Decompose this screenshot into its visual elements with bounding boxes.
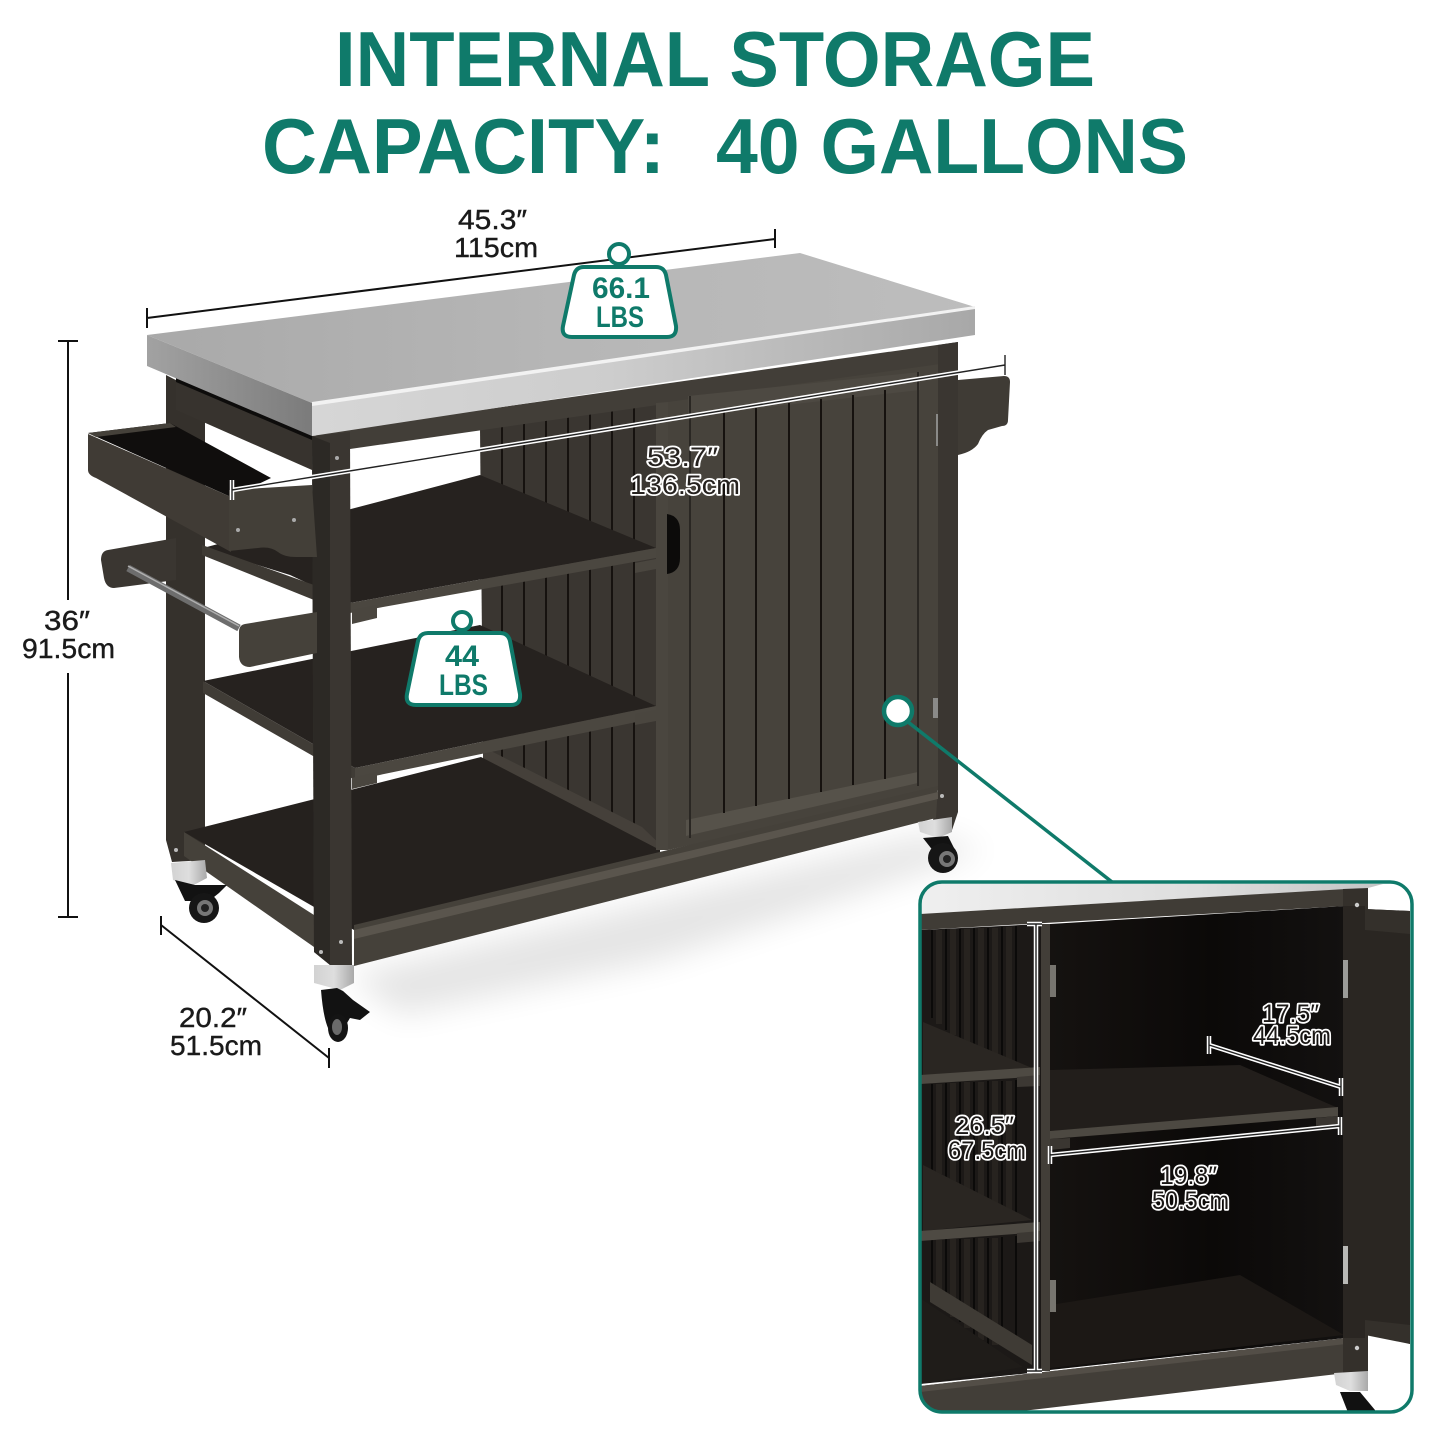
dimension: interior depth 17.5 in (1209, 1000, 1341, 1096)
dimension: interior width 19.8 in: 50.5cm (1152, 1187, 1229, 1215)
dimension: overall length 53.7 in (232, 355, 1005, 500)
inset panel: cabinet interior (920, 882, 1412, 1423)
dimension: width 45.3 in: 115cm (454, 232, 538, 263)
weight badge: 66.1 lbs (563, 244, 676, 337)
rear caster (171, 860, 207, 887)
open door (1365, 909, 1410, 1344)
towel bar (101, 538, 317, 667)
dimension: interior height 26.5 in: 26.5″ (955, 1112, 1014, 1140)
title: INTERNAL STORAGE (335, 15, 1095, 103)
right hinges (1343, 960, 1348, 998)
front left leg (174, 432, 352, 965)
weight badge: 44 lbs (407, 612, 520, 705)
dimension: interior height 26.5 in (948, 924, 1042, 1371)
cart product illustration (88, 253, 1010, 1042)
dimension: overall length 53.7 in: 136.5cm (630, 470, 740, 500)
divider post (1041, 924, 1050, 1371)
right post and towel bracket (933, 342, 1010, 830)
dimension: interior depth 17.5 in: 17.5″ (1262, 1000, 1319, 1028)
interior floor (1050, 1275, 1344, 1368)
door hinges (936, 414, 942, 446)
title (262, 15, 1188, 190)
interior back wall (1050, 906, 1345, 1370)
middle shelf (203, 625, 656, 789)
title: CAPACITY: (262, 102, 665, 190)
upper shelf (202, 475, 656, 624)
dimension: interior height 26.5 in: 67.5cm (948, 1137, 1026, 1165)
dimension: width 45.3 in: 45.3″ (458, 204, 527, 235)
dimension: interior width 19.8 in (1050, 1117, 1340, 1215)
dimension: height 36 in (22, 341, 115, 917)
right post (1343, 888, 1368, 1373)
front caster (314, 965, 354, 990)
right caster (918, 817, 952, 838)
callout connector to inset (884, 697, 1112, 882)
left open shelf section (920, 924, 1041, 1384)
dimension: depth 20.2 in: 51.5cm (170, 1030, 262, 1061)
cabinet door (656, 364, 942, 850)
dimension: depth 20.2 in: 20.2″ (179, 1002, 247, 1033)
dimension: height 36 in: 91.5cm (22, 633, 115, 664)
casters (171, 817, 958, 1042)
stainless steel top (147, 253, 975, 436)
weight badge: 44 lbs: 44 (445, 640, 479, 673)
bottom beam (922, 1338, 1343, 1410)
weight badge: 66.1 lbs: 66.1 (592, 272, 650, 305)
dimension: overall length 53.7 in: 53.7″ (647, 442, 719, 472)
front beam under top (312, 342, 958, 449)
dimension: width 45.3 in (147, 204, 775, 328)
dimension: height 36 in: 36″ (44, 605, 90, 636)
rear slatted panel (480, 403, 668, 850)
dimension: interior depth 17.5 in: 44.5cm (1253, 1022, 1331, 1050)
left side rail (176, 380, 312, 470)
front bottom rail (354, 786, 938, 966)
inset caster (1334, 1371, 1368, 1391)
floor shadow (350, 835, 985, 1015)
dimension: interior width 19.8 in: 19.8″ (1160, 1162, 1217, 1190)
left hinges (1050, 965, 1056, 997)
title: 40 GALLONS (716, 102, 1188, 190)
side tray (88, 423, 317, 557)
top beam (920, 889, 1346, 930)
dimension: depth 20.2 in (161, 916, 329, 1068)
weight badge: 66.1 lbs: LBS (596, 301, 644, 334)
bottom shelf (184, 757, 660, 947)
interior shelf (1050, 1065, 1338, 1150)
steel top strip (920, 884, 1383, 914)
rear left leg (166, 375, 205, 862)
door handle cutout (667, 514, 680, 574)
weight badge: 44 lbs: LBS (439, 669, 488, 702)
